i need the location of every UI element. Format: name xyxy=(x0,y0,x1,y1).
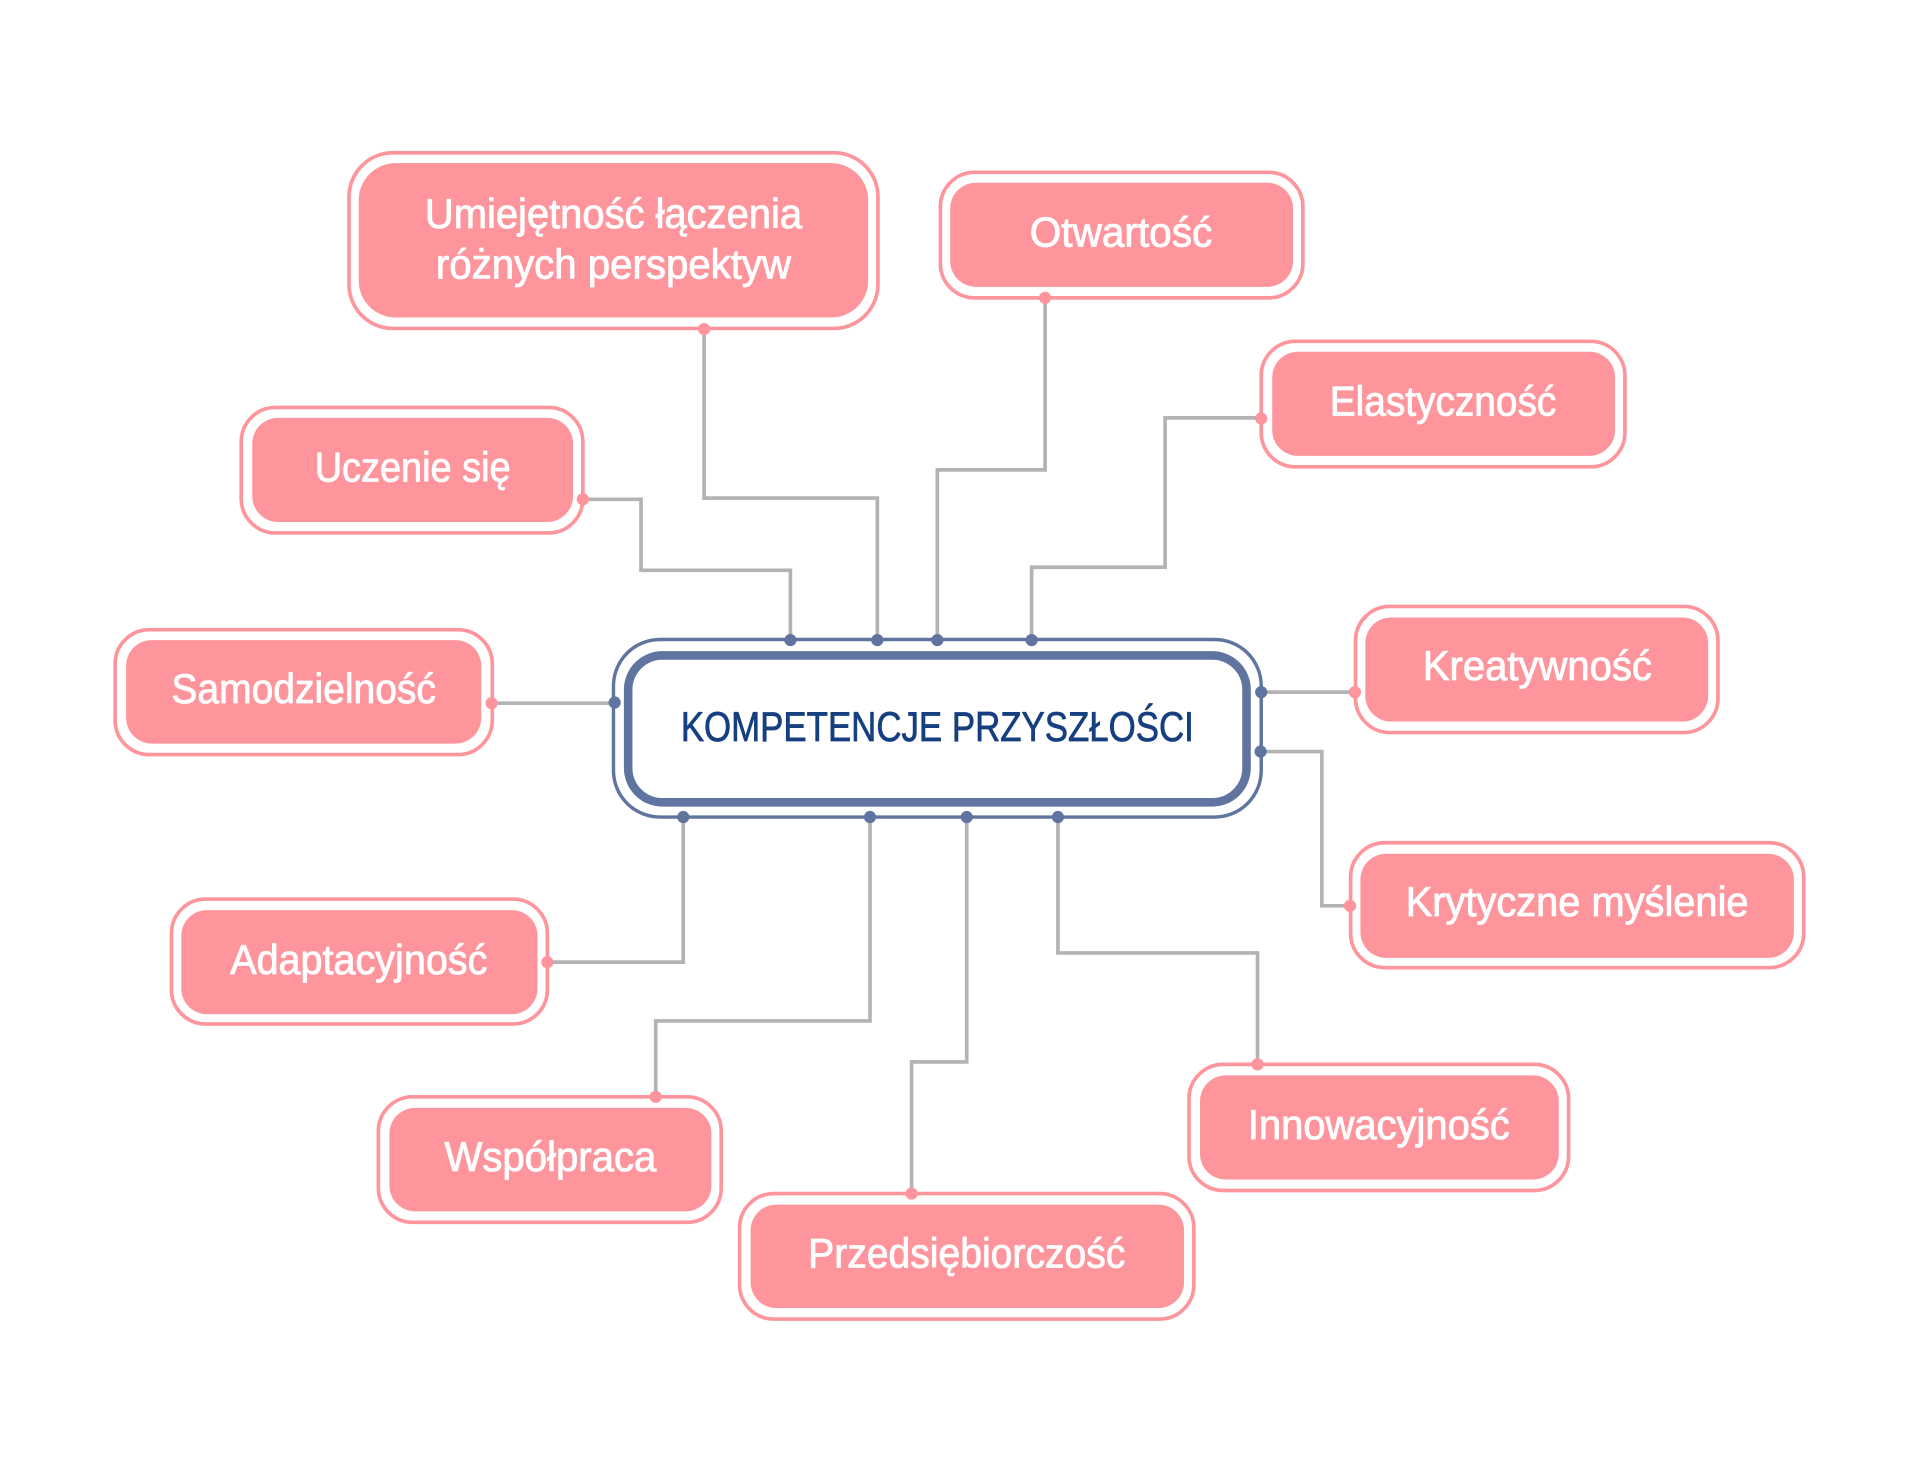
node: Otwartość xyxy=(940,172,1303,298)
connector: Otwartość to centre xyxy=(931,292,1051,646)
node: Samodzielność: Samodzielność xyxy=(171,665,436,712)
node: Adaptacyjność xyxy=(171,899,547,1024)
node: Innowacyjność: Innowacyjność xyxy=(1248,1101,1510,1148)
node: Elastyczność xyxy=(1261,341,1625,467)
node: Krytyczne myślenie: Krytyczne myślenie xyxy=(1406,878,1749,925)
node: Kreatywność: Kreatywność xyxy=(1423,642,1652,689)
connector: Przedsiębiorczość to centre xyxy=(906,811,973,1200)
node: Współpraca xyxy=(378,1097,721,1222)
node: Uczenie się xyxy=(241,407,583,533)
node: Elastyczność: Elastyczność xyxy=(1330,377,1556,424)
connector: Współpraca to centre xyxy=(650,811,876,1103)
node: Współpraca: Współpraca xyxy=(444,1133,657,1180)
connector: Krytyczne myślenie to centre xyxy=(1254,745,1356,912)
connector: Samodzielność to centre xyxy=(486,696,621,709)
node: Kreatywność xyxy=(1356,606,1718,733)
connector: Elastyczność to centre xyxy=(1026,412,1267,646)
node: Przedsiębiorczość: Przedsiębiorczość xyxy=(808,1230,1125,1277)
connector: Uczenie się to centre xyxy=(577,493,797,646)
connector: Umiejętność łączenia to centre xyxy=(698,323,883,646)
connector: Innowacyjność to centre xyxy=(1052,811,1264,1071)
node: Samodzielność xyxy=(115,630,492,755)
node: Uczenie się: Uczenie się xyxy=(315,444,511,491)
connector: Kreatywność to centre xyxy=(1255,686,1361,698)
node: Innowacyjność xyxy=(1189,1064,1569,1191)
central node: Kompetencje przyszłości xyxy=(613,639,1261,817)
node: Umiejętność łączenia różnych perspektyw: różnych perspektyw xyxy=(436,240,792,287)
central node: Kompetencje przyszłości: KOMPETENCJE PRZYSZŁOŚCI xyxy=(681,702,1194,750)
node: Krytyczne myślenie xyxy=(1351,843,1804,968)
node: Umiejętność łączenia różnych perspektyw xyxy=(349,153,878,328)
connector: Adaptacyjność to centre xyxy=(541,811,689,968)
node: Adaptacyjność: Adaptacyjność xyxy=(230,936,487,983)
node: Umiejętność łączenia różnych perspektyw: Umiejętność łączenia xyxy=(425,190,803,237)
node: Przedsiębiorczość xyxy=(740,1194,1194,1319)
node: Otwartość: Otwartość xyxy=(1030,208,1212,255)
